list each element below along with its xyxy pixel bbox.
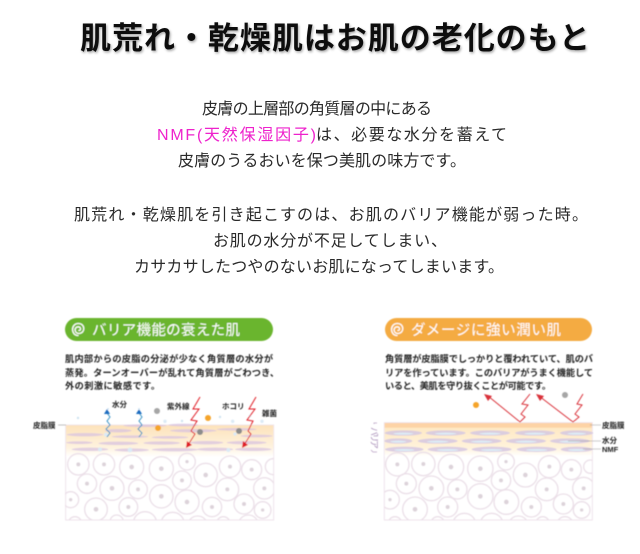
skin diagram: moist skin [384,421,594,521]
icons: red lightning arrows [186,397,256,448]
icons: water evaporation arrows [104,409,142,437]
text block: NMF introduction: NMF(天然保湿因子) [157,126,316,144]
labels: moist skin diagram: NMF [602,445,619,454]
text block: weakened barrier description: 蒸発。ターンオーバーが乱れて角質層がごわつき、 [65,367,279,378]
text block: NMF introduction: 皮膚の上層部の角質層の中にある [202,100,432,118]
text block: NMF introduction: 皮膚のうるおいを保つ美肌の味方です。 [178,152,466,170]
labels: weakened barrier diagram: 水分 [112,399,127,409]
text block: weakened barrier description: 肌内部からの皮脂の分泌が少なく角質層の水分が [65,353,273,364]
text block: moist skin description: 角質層が皮脂膜でしっかりと覆われていて、肌のバ [385,353,593,364]
labels: weakened barrier diagram: 紫外線 [167,401,190,411]
heading pill: moist skin [385,318,592,341]
labels: moist skin diagram: バリア [369,427,379,449]
text block: weakened barrier description: 外の刺激に敏感です。 [65,380,160,391]
heading pill: weakened barrier [65,318,273,341]
title: 肌荒れ・乾燥肌はお肌の老化のもと [80,21,590,56]
heading pill: moist skin: ダメージに強い潤い肌 [411,322,561,339]
text block: NMF introduction [157,100,507,170]
panel: weakened barrier skin [33,318,281,536]
labels: weakened barrier diagram: ホコリ [222,402,244,411]
text block: moist skin description [385,353,593,391]
heading pill: weakened barrier: バリア機能の衰えた肌 [92,322,240,339]
labels: moist skin diagram: 皮脂膜 [602,420,625,430]
labels: moist skin diagram [369,420,625,454]
text block: barrier explanation [74,206,588,276]
skin diagram: weakened barrier [64,420,274,521]
panel: damage-resistant moist skin [369,318,625,537]
icons: particles [77,408,251,435]
labels: moist skin diagram: 水分 [602,435,617,445]
text block: barrier explanation: カサカサしたつやのないお肌になってしまいます。 [134,258,504,276]
icons: deflected red arrows [484,394,583,422]
text block: moist skin description: いると、美肌を守り抜くことが可能です。 [385,380,551,391]
labels: weakened barrier diagram: 皮脂膜 [33,420,56,430]
labels: weakened barrier diagram: 雑菌 [262,408,277,418]
text block: barrier explanation: 肌荒れ・乾燥肌を引き起こすのは、お肌のバリア機能が弱った時。 [74,206,588,224]
text block: NMF introduction: は、必要な水分を蓄えて [316,126,507,144]
text block: weakened barrier description [65,353,279,391]
text block: barrier explanation: お肌の水分が不足してしまい、 [213,232,447,250]
icons: deflected particles [473,392,568,408]
text block: moist skin description: リアを作っています。このバリアがうまく機能して [385,367,593,378]
labels: weakened barrier diagram [33,399,277,430]
